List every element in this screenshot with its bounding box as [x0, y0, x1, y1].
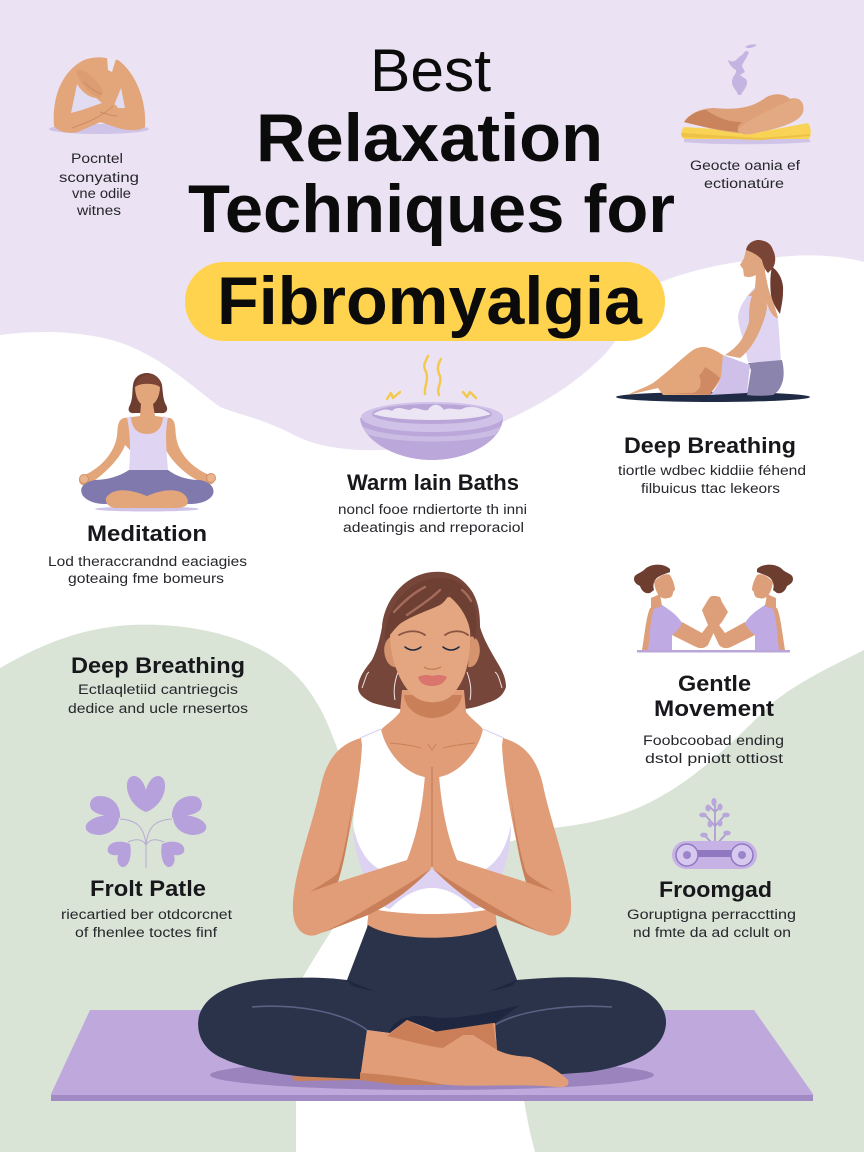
- ears: [384, 636, 480, 667]
- background: left green shape: [0, 625, 365, 1152]
- top lavender band: [353, 825, 511, 909]
- technique description: [59, 151, 139, 218]
- yoga mat: [51, 1010, 813, 1101]
- main figure: meditating woman: [198, 572, 666, 1087]
- heading: [654, 671, 775, 721]
- heading: Froomgad: [659, 877, 772, 902]
- left foot and sole shadow: [291, 1072, 445, 1085]
- technique description: Lod theraccrandnd eaciagies: [48, 554, 247, 569]
- closed eyes: [405, 647, 459, 650]
- hair front strands: [385, 578, 451, 640]
- icon: plant on roller: [672, 798, 757, 869]
- technique description: witnes: [76, 203, 121, 218]
- panel: deep breathing, right: [616, 240, 810, 496]
- neck and chest: [362, 690, 500, 778]
- technique description: dstol pniott ottiost: [645, 751, 783, 766]
- title line: Best: Best: [370, 37, 491, 104]
- hair right part: [450, 579, 476, 640]
- trouser highlights: [252, 1006, 612, 1030]
- neck shadow: [404, 695, 462, 718]
- technique description: Geocte oania ef: [690, 158, 800, 173]
- technique description: Pocntel: [71, 151, 123, 166]
- technique description: [618, 463, 806, 496]
- technique description: Ectlaqletiid cantriegcis: [78, 682, 238, 697]
- arm shading: [310, 795, 554, 933]
- technique description: [338, 502, 527, 535]
- title highlight pill: [185, 262, 665, 341]
- icon: scent smoke: [728, 44, 757, 95]
- heading: Deep Breathing: [71, 653, 245, 678]
- technique description: Foobcoobad ending: [643, 733, 784, 748]
- technique description: goteaing fme bomeurs: [68, 571, 224, 586]
- technique description: vne odile: [72, 186, 131, 201]
- technique description: [48, 554, 247, 586]
- heading: Frolt Patle: [90, 876, 206, 901]
- right arm and praying hand: [432, 738, 571, 936]
- midriff: [367, 908, 497, 938]
- background: right green shape: [492, 650, 864, 1152]
- panel: frolt patle, lower left: [61, 776, 232, 940]
- face: [390, 597, 470, 702]
- panel: deep breathing, left: [68, 653, 248, 716]
- icon: seated woman in profile: [616, 240, 810, 402]
- icon: two women with palms together: [634, 565, 793, 652]
- top straps: [360, 729, 504, 738]
- chest lines: [390, 743, 475, 750]
- top hem: [390, 888, 474, 913]
- hand centre line: [431, 767, 433, 866]
- icon: bowl: [360, 402, 503, 460]
- technique description: nd fmte da ad cclult on: [633, 925, 791, 940]
- technique description: noncl fooe rndiertorte th inni: [338, 502, 527, 517]
- icon: person lying on yellow mat: [681, 94, 811, 144]
- title line: Fibromyalgia: Fibromyalgia: [217, 263, 643, 339]
- panel: meditation, left: [48, 373, 247, 586]
- technique description: dedice and ucle rnesertos: [68, 701, 248, 716]
- heading: Movement: [654, 696, 775, 721]
- technique description: ectionatúre: [704, 176, 784, 191]
- trousers: [198, 925, 666, 1079]
- left arm and praying hand: [293, 738, 432, 936]
- heading: Gentle: [678, 671, 751, 696]
- heading: Meditation: [87, 521, 207, 546]
- nose: [424, 667, 441, 669]
- title line: Techniques for: Techniques for: [188, 171, 675, 247]
- technique description: of fhenlee toctes finf: [75, 925, 217, 940]
- technique description: [643, 733, 784, 766]
- panel: warm baths, centre: [338, 356, 527, 535]
- hair: [358, 572, 506, 710]
- technique description: filbuicus ttac lekeors: [641, 481, 780, 496]
- lips: [418, 675, 447, 686]
- panel: self hug technique, top left: [49, 57, 149, 218]
- eyebrows: [399, 631, 468, 635]
- technique description: riecartied ber otdcorcnet: [61, 907, 232, 922]
- title: [185, 37, 675, 341]
- hair strands: [362, 672, 502, 700]
- icon: lavender flower: [86, 776, 206, 868]
- panel: gentle movement, right: [634, 565, 793, 766]
- heading: Warm lain Baths: [347, 470, 519, 495]
- heading: Deep Breathing: [624, 433, 796, 458]
- technique description: adeatingis and rreporaciol: [343, 520, 524, 535]
- hair highlights: [394, 587, 471, 615]
- panel: froomgad, lower right: [627, 798, 796, 940]
- white top: [353, 729, 512, 876]
- title line: Relaxation: Relaxation: [256, 100, 603, 176]
- technique description: [68, 682, 248, 716]
- technique description: Goruptigna perracctting: [627, 907, 796, 922]
- panel: resting technique, top right: [681, 44, 811, 191]
- background: lavender wave: [0, 0, 864, 450]
- icon: hugging arms: [49, 57, 149, 134]
- technique description: [690, 158, 800, 191]
- trouser shading: [347, 980, 520, 1034]
- crossed shin and foot: [360, 1020, 568, 1087]
- technique description: sconyating: [59, 170, 139, 185]
- foot shadow: [387, 1020, 497, 1050]
- technique description: tiortle wdbec kiddiie féhend: [618, 463, 806, 478]
- technique description: [61, 907, 232, 940]
- technique description: [627, 907, 796, 940]
- icon: meditating woman: [79, 373, 216, 512]
- icon: steam: [387, 356, 476, 399]
